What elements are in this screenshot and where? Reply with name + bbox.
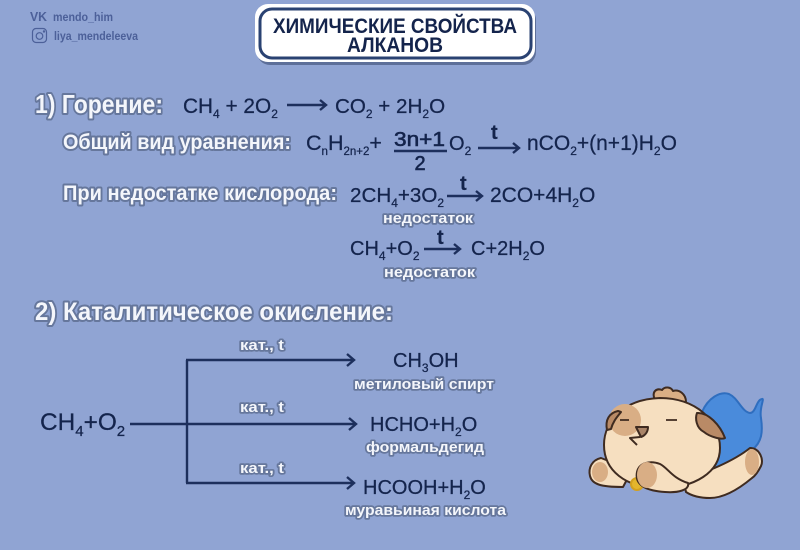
social handles xyxy=(30,9,139,43)
label: oxygen deficit: При недостатке кислорода: xyxy=(63,182,337,205)
icon: instagram xyxy=(32,28,46,42)
equation: methane combustion: 2 xyxy=(271,107,278,121)
equation: methane combustion: 2 xyxy=(422,107,429,121)
equation: deficit 1: 2 xyxy=(437,196,444,210)
product: formaldehyde xyxy=(366,414,484,456)
product: methanol: 3 xyxy=(422,361,429,375)
equation: deficit 2: 4 xyxy=(379,249,386,263)
equation: deficit 2: O xyxy=(529,238,545,260)
instagram handle: liya_mendeleeva xyxy=(54,31,139,43)
product: formaldehyde: HCHO+H xyxy=(370,414,455,436)
equation: general combustion: nCO xyxy=(527,132,570,155)
product: formic acid: HCOOH+H xyxy=(363,477,464,499)
equation: deficit 1 xyxy=(350,173,595,227)
equation: general combustion: 2 xyxy=(570,144,577,158)
mascot: sleeping dog with cape xyxy=(589,387,763,498)
eye patch xyxy=(609,404,641,436)
back leg xyxy=(683,448,762,498)
equation: deficit 1: 4 xyxy=(391,196,398,210)
title xyxy=(255,4,536,65)
equation: general combustion: t xyxy=(491,122,498,144)
title: АЛКАНОВ xyxy=(347,34,443,57)
equation: deficit 1: 2 xyxy=(572,196,579,210)
left ear xyxy=(606,411,621,430)
equation: methane combustion: + 2O xyxy=(220,95,271,118)
equation: deficit 2 xyxy=(350,227,545,281)
heading: catalytic oxidation: 2) Каталитическое окисление: xyxy=(35,298,393,326)
reactants: 4 xyxy=(75,423,84,440)
reactants: 2 xyxy=(117,423,125,440)
vk handle: mendo_him xyxy=(53,12,113,24)
equation: deficit 2: C+2H xyxy=(471,238,523,260)
product: methanol xyxy=(354,350,494,393)
equation: general combustion: 3n+1 xyxy=(394,129,445,151)
equation: general combustion: n xyxy=(322,146,328,158)
equation: general combustion: O xyxy=(661,132,677,155)
equation: general combustion: + xyxy=(369,131,382,155)
reactants: CH xyxy=(40,409,75,436)
equation: methane combustion: CH xyxy=(183,95,213,118)
condition labels: кат., t xyxy=(240,399,284,416)
equation: general combustion xyxy=(306,122,677,175)
equation: deficit 1: 2CO+4H xyxy=(490,184,572,207)
product: formic acid: O xyxy=(470,477,486,499)
cape xyxy=(684,393,763,480)
branching arrows xyxy=(130,354,356,489)
equation: methane combustion: CO xyxy=(335,95,366,118)
equation: general combustion: 2 xyxy=(414,153,426,175)
product: formic acid xyxy=(345,477,507,519)
condition labels: кат., t xyxy=(240,460,284,477)
equation: deficit 2: CH xyxy=(350,238,379,260)
product: formaldehyde: O xyxy=(462,414,477,436)
equation: methane combustion: 2 xyxy=(366,107,373,121)
reactants: +O xyxy=(84,409,117,436)
equation: deficit 1: недостаток xyxy=(383,210,474,227)
equation: deficit 2: t xyxy=(437,227,444,249)
equation: methane combustion xyxy=(183,95,445,121)
equation: deficit 2: +O xyxy=(386,238,413,260)
tuft xyxy=(654,387,686,403)
title: ХИМИЧЕСКИЕ СВОЙСТВА xyxy=(273,14,517,38)
beak xyxy=(636,427,648,437)
equation: deficit 2: 2 xyxy=(523,249,530,263)
equation: general combustion: H xyxy=(328,131,343,155)
arm xyxy=(637,462,688,492)
collar bell xyxy=(631,478,643,490)
equation: methane combustion: 4 xyxy=(213,107,220,121)
equation: general combustion: 2 xyxy=(654,144,661,158)
front paw xyxy=(589,458,632,487)
product: methanol: CH xyxy=(393,350,422,372)
equation: methane combustion: O xyxy=(429,95,445,118)
equation: methane combustion: + 2H xyxy=(373,95,422,118)
product: methanol: OH xyxy=(429,350,459,372)
equation: general combustion: 2 xyxy=(465,144,472,158)
equation: deficit 2: 2 xyxy=(413,249,420,263)
eyes xyxy=(620,419,677,421)
heading: combustion: 1) Горение: xyxy=(35,89,163,119)
right ear xyxy=(696,413,725,439)
equation: deficit 1: O xyxy=(579,184,595,207)
equation: general combustion: O xyxy=(449,133,465,155)
equation: general combustion: 2n+2 xyxy=(343,146,369,158)
equation: general combustion: C xyxy=(306,131,322,155)
equation: deficit 1: 2CH xyxy=(350,184,391,207)
label: general equation: Общий вид уравнения: xyxy=(63,131,291,154)
product: formaldehyde: 2 xyxy=(455,425,462,439)
equation: deficit 1: t xyxy=(460,173,467,195)
body xyxy=(604,398,720,488)
equation: general combustion: +(n+1)H xyxy=(577,132,654,155)
equation: deficit 1: +3O xyxy=(398,184,437,207)
product: formic acid: 2 xyxy=(464,488,471,502)
product: formic acid: муравьиная кислота xyxy=(345,502,507,519)
condition labels: кат., t xyxy=(240,337,284,354)
condition labels xyxy=(240,337,284,477)
product: methanol: метиловый спирт xyxy=(354,376,494,393)
icon: vk: VK xyxy=(30,9,48,24)
equation: deficit 2: недостаток xyxy=(384,264,476,281)
product: formaldehyde: формальдегид xyxy=(366,439,484,456)
